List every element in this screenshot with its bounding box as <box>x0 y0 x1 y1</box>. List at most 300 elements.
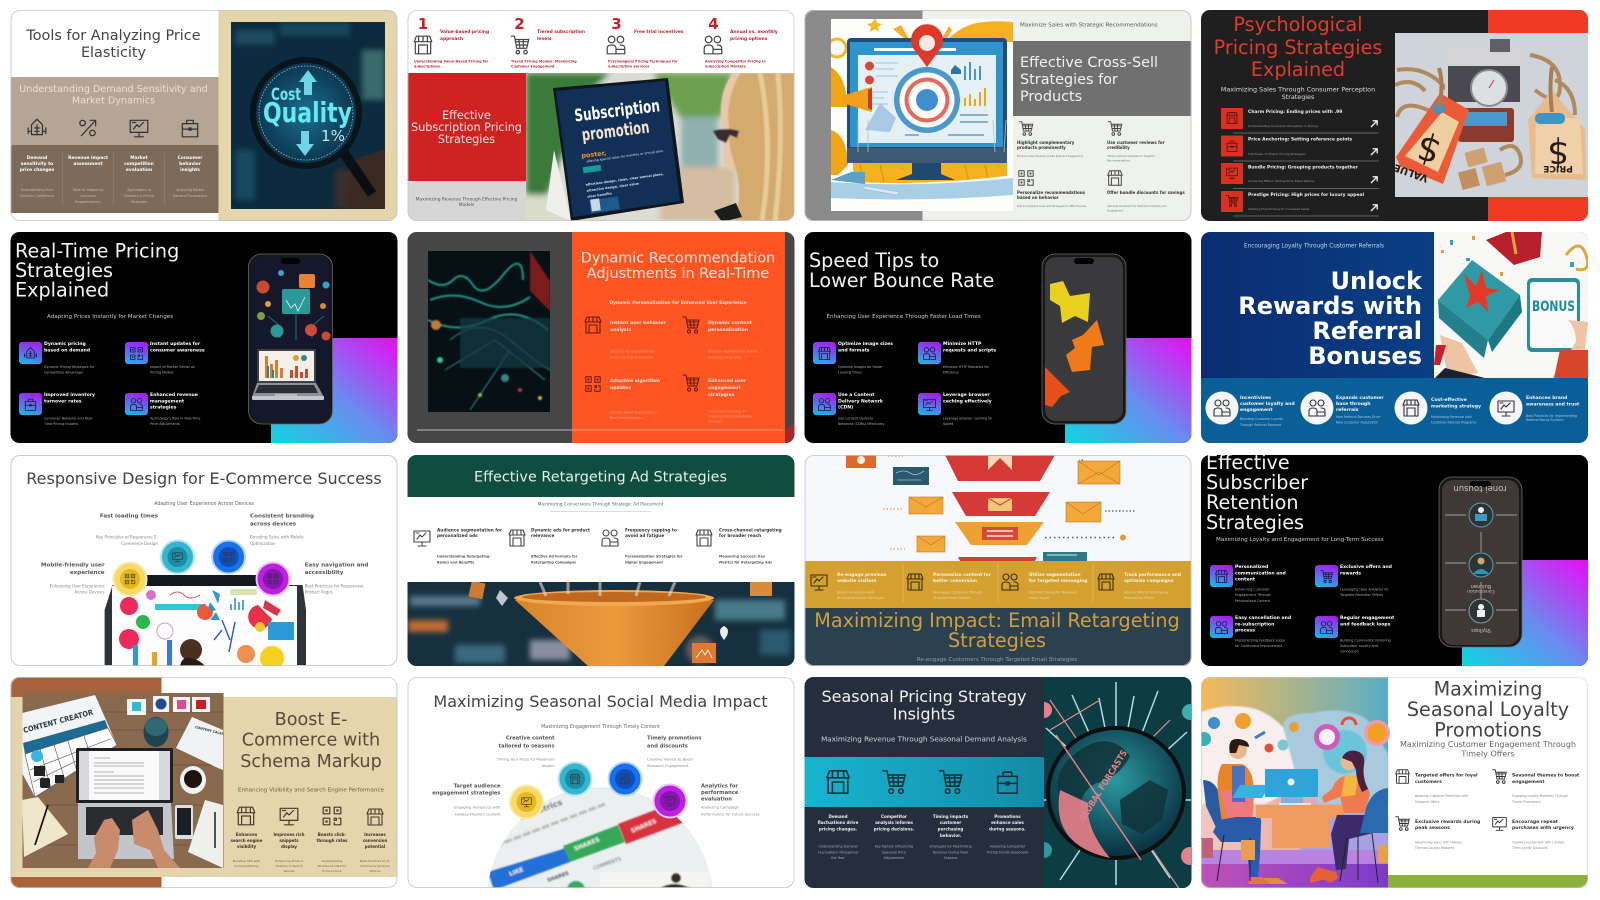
column descriptions: Strategies <box>131 200 147 204</box>
step descriptions <box>414 60 766 68</box>
column descriptions: Consumer <box>80 194 97 198</box>
title: Retention <box>1206 491 1299 514</box>
benefit descriptions: Through Referral Bonuses <box>1239 423 1282 427</box>
phone with org chart: Bulunan <box>1471 583 1491 589</box>
item descriptions <box>437 554 772 564</box>
feature titles: purchases with urgency <box>1512 825 1574 831</box>
feature titles: turnover rates <box>44 398 82 404</box>
feature descriptions: Maximizing Sales with Holiday- <box>1415 840 1463 844</box>
step descriptions: Subscription Services <box>608 64 649 68</box>
feature descriptions: Loading Times <box>838 370 862 374</box>
feature descriptions <box>43 365 200 426</box>
item titles: Personalize recommendations <box>1017 190 1086 195</box>
column titles: during seasons. <box>989 826 1026 832</box>
benefit titles: conversion <box>363 838 387 843</box>
feature titles: requests and scripts <box>943 348 996 354</box>
tagline: Encouraging Loyalty Through Customer Referrals <box>1244 244 1384 250</box>
feature icons <box>585 317 699 391</box>
title box: Effective <box>442 109 491 122</box>
benefit titles: display <box>281 844 297 849</box>
title band <box>1013 41 1192 116</box>
key point descriptions: Key Principles of Responsive E- <box>96 534 159 540</box>
key point titles: Analytics for <box>701 784 738 790</box>
item titles: Highlight complementary <box>1017 140 1075 145</box>
subtitle: Timely Offers <box>1460 750 1515 758</box>
column titles: enhance sales <box>991 820 1024 825</box>
key point descriptions: Enhancing User Experience <box>50 584 105 588</box>
photo: tablet subscription promotion <box>526 73 795 222</box>
feature descriptions: Themed Loyalty Rewards <box>1414 846 1454 850</box>
item descriptions: Basics and Benefits <box>437 560 474 564</box>
column descriptions: Strategies for Maximizing <box>929 844 972 848</box>
key point titles: Timely promotions <box>647 736 702 742</box>
feature titles: Exclusive offers and <box>1340 564 1392 570</box>
column descriptions: Analyzing Competitor <box>990 844 1026 848</box>
icon band <box>804 757 1044 807</box>
feature titles: engagement <box>1512 779 1545 785</box>
feature titles: caching effectively <box>943 398 992 404</box>
benefit titles: search engine <box>231 838 263 843</box>
action band: optimize campaigns <box>1124 578 1174 584</box>
feature descriptions <box>1235 588 1391 654</box>
benefit descriptions: New Customer Acquisition <box>1336 420 1378 424</box>
photo: price tags and camera: VALUE <box>1392 161 1430 184</box>
step descriptions: Analyzing Competitor Pricing in <box>705 60 766 64</box>
title band: Re-engage Customers Through Targeted Email Strategies <box>917 657 1077 663</box>
column titles: Competitor <box>881 814 907 819</box>
panel: effective subscription pricing strategies <box>408 10 795 222</box>
list titles: Bundle Pricing: Grouping products together <box>1248 164 1359 170</box>
step titles: Free trial incentives <box>634 29 684 35</box>
benefit descriptions: Markup <box>369 869 381 873</box>
title: Explained <box>1251 58 1345 81</box>
photo: magnifier cost quality: Quality <box>263 96 352 129</box>
title: Schema Markup <box>240 752 382 772</box>
benefit descriptions: Best Practices for Implementing <box>1526 414 1577 418</box>
column labels: price changes <box>20 167 55 173</box>
subtitle: Dynamic Personalization for Enhanced User Experience <box>609 300 747 306</box>
item titles: Offer bundle discounts for savings <box>1107 190 1185 195</box>
item descriptions: Measuring Success: Key <box>719 554 766 558</box>
photo: global forecast globe: GLOBAL FORCASTS <box>1078 749 1130 824</box>
column titles: pricing changes. <box>819 826 858 832</box>
panel: dynamic recommendation adjustments <box>408 232 795 443</box>
step titles: Value-based pricing <box>440 29 489 35</box>
benefit icons <box>1206 392 1522 424</box>
column descriptions: Analyzing Market <box>176 188 204 192</box>
benefit titles: potential <box>365 844 386 849</box>
photo: social media metrics dome: SHARES <box>547 870 570 884</box>
title box <box>408 73 526 181</box>
column descriptions: Responsiveness <box>75 200 101 204</box>
column descriptions: Elasticity Coefficients <box>20 194 54 198</box>
column titles: customer <box>940 820 961 825</box>
action band: Personalized Email Strategies <box>837 596 885 600</box>
column titles: purchasing <box>938 826 963 832</box>
panel: boost e-commerce with schema markup <box>10 677 398 888</box>
panel: seasonal pricing strategy insights <box>804 677 1199 890</box>
step numbers <box>419 18 718 29</box>
column labels: sensitivity to <box>21 161 53 167</box>
column descriptions: Seasons <box>944 856 958 860</box>
list descriptions: Understanding Consumer Perception in Pricing <box>1248 124 1318 128</box>
key point titles: evaluation <box>701 796 732 802</box>
benefit titles: awareness and trust <box>1526 402 1580 408</box>
benefit descriptions: Maximizing Revenue with <box>1431 415 1472 419</box>
feature descriptions: Engaging Loyalty Members Through <box>1512 794 1568 798</box>
feature titles: personalization <box>708 327 748 333</box>
step descriptions: Understanding Value-Based Pricing for <box>414 60 489 64</box>
feature titles: Dynamic content <box>708 320 753 326</box>
action band: Re-engage previous <box>837 572 887 578</box>
feature descriptions: Building Community: Fostering <box>1340 638 1391 642</box>
benefit titles: visibility <box>237 844 257 849</box>
column descriptions: Adjustments <box>884 856 905 860</box>
title band: Maximizing Impact: Email Retargeting <box>814 609 1180 632</box>
key point descriptions: Impact <box>542 764 555 768</box>
subtitle: Maximizing Loyalty and Engagement for Long-Term Success <box>1216 537 1384 543</box>
feature descriptions: Connection <box>1340 650 1359 654</box>
key point titles: Fast loading times <box>100 514 159 520</box>
feature descriptions: Targeted Retention Efforts <box>1339 593 1383 597</box>
feature titles: based on demand <box>44 348 90 354</box>
list descriptions: Anchoring Effect: Setting Price Expectations <box>1248 179 1315 183</box>
action band: website visitors <box>837 578 877 584</box>
panel: effective subscriber retention strategies <box>1201 451 1588 666</box>
column descriptions: Tools for Measuring <box>72 188 103 192</box>
feature descriptions: Consumer Behavior and Real- <box>44 416 94 420</box>
item titles: credibility <box>1107 145 1130 150</box>
item descriptions: Engagement <box>1107 208 1123 212</box>
feature titles: Seasonal themes to boost <box>1512 772 1580 778</box>
benefit titles: engagement <box>1240 407 1273 413</box>
item titles: based on behavior <box>1017 195 1059 200</box>
item titles: Frequency capping to <box>625 528 677 534</box>
panel: tools for analyzing price elasticity <box>10 10 398 221</box>
item descriptions: Effective Ad Formats for <box>531 554 578 558</box>
feature descriptions: Optimize Images for Faster <box>838 365 883 369</box>
benefit titles: marketing strategy <box>1431 404 1481 410</box>
feature titles: Use a Content <box>838 392 875 398</box>
benefit descriptions <box>233 859 390 873</box>
feature descriptions: Continuous Learning for <box>708 410 747 414</box>
column labels: evaluation <box>126 167 152 173</box>
feature descriptions: Feedback Integration <box>708 356 742 360</box>
feature titles: Regular engagement <box>1340 615 1395 621</box>
title: Unlock <box>1331 267 1423 295</box>
benefit titles: Increases <box>364 832 386 837</box>
subtitle: Adapting User Experience Across Devices <box>154 501 254 507</box>
item titles: Dynamic ads for product <box>531 528 590 534</box>
feature titles: Dynamic pricing <box>44 341 86 347</box>
progress rings <box>510 762 686 818</box>
column labels: competition <box>124 161 154 167</box>
feature descriptions: Technology's Role in Real-Time <box>149 416 200 420</box>
benefit titles: Expands customer <box>1336 395 1384 401</box>
feature titles: strategies <box>708 392 735 398</box>
column descriptions: Revenue During Peak <box>933 850 968 854</box>
key point titles: Easy navigation and <box>305 562 368 568</box>
item descriptions: Understanding Retargeting: <box>437 554 491 558</box>
feature titles: (CDN) <box>838 404 853 410</box>
photo: magnifier cost quality: Cost <box>271 85 301 105</box>
photo: content creator desk: CONTENT CREATOR <box>22 708 94 735</box>
step descriptions: Subscription Markets <box>705 64 746 68</box>
subtitle: Maximizing Revenue Through Seasonal Demand Analysis <box>821 734 1027 744</box>
feature descriptions: Dynamic Pricing Strategies for <box>44 365 95 369</box>
benefit descriptions: Customer Referral Programs <box>1431 420 1476 424</box>
title: Insights <box>893 704 955 724</box>
feature titles: Easy cancellation and <box>1235 615 1291 621</box>
panel: maximizing seasonal social media impact <box>408 677 794 899</box>
title: Explained <box>15 278 109 302</box>
benefit titles: referrals <box>1336 407 1359 413</box>
key point descriptions: Seasonal Engagement <box>647 764 689 768</box>
column descriptions <box>818 844 1028 860</box>
action band: Track performance and <box>1124 572 1181 578</box>
title box: Subscription Pricing <box>411 121 522 134</box>
funnel and envelopes illustration <box>846 455 1135 561</box>
subtitle: Maximizing Conversions Through Strategic Ad Placement <box>538 502 664 508</box>
illustration: two people at a desk <box>1197 677 1390 888</box>
column descriptions: Pricing Trends Seasonally <box>987 850 1028 854</box>
feature titles: Encourage repeat <box>1512 819 1559 825</box>
key point titles: accessibility <box>305 570 344 576</box>
subtitle box <box>408 181 526 221</box>
benefit descriptions: How Referral Bonuses Drive <box>1336 415 1381 419</box>
benefit descriptions: Implementing <box>322 859 343 863</box>
list titles: Charm Pricing: Ending prices with .99 <box>1248 109 1342 115</box>
phone with org chart: ronei tousun <box>1453 483 1507 493</box>
feature titles: communication and <box>1235 570 1286 576</box>
benefit titles: through rates <box>316 838 348 843</box>
item descriptions: Retargeting Campaigns <box>531 560 576 564</box>
step numbers: 4 <box>708 15 719 33</box>
feature titles: process <box>1235 628 1255 634</box>
panel: effective retargeting ad strategies <box>408 455 794 666</box>
benefit descriptions: E-Commerce <box>322 869 342 873</box>
photo: gift and bonus phone: BONUS <box>1532 299 1575 315</box>
item titles <box>437 528 782 539</box>
step titles: Annual vs. monthly <box>730 29 778 35</box>
column labels: behavior <box>179 161 202 167</box>
title band: Effective Cross-Sell <box>1020 55 1158 71</box>
photo: magnifier cost quality: 1% <box>321 127 345 145</box>
feature descriptions: Engagement Through <box>1235 593 1271 597</box>
panel: effective cross-sell strategies <box>804 10 1192 221</box>
benefit titles: Improves rich <box>274 832 305 837</box>
feature titles: Improved inventory <box>44 392 95 398</box>
phone with org chart <box>1439 477 1522 647</box>
benefit descriptions: Best Practices for E- <box>360 859 390 863</box>
feature descriptions: Boosting Customer Retention with <box>1415 794 1468 798</box>
benefit titles: base through <box>1336 401 1371 407</box>
feature titles <box>44 341 205 410</box>
panel: maximizing impact email retargeting <box>804 455 1192 666</box>
item titles: for broader reach <box>719 533 761 539</box>
benefit descriptions <box>1239 414 1577 427</box>
column titles: Demand <box>828 814 848 819</box>
benefit titles: customer loyalty and <box>1240 401 1295 407</box>
list descriptions: Utilizing Price Ending for Increased Sales <box>1248 207 1310 211</box>
feature icons <box>1396 770 1506 830</box>
column descriptions: Applications of <box>127 188 152 192</box>
feature icons <box>1210 565 1338 638</box>
title band: Strategies for <box>1020 72 1118 88</box>
title: Maximizing Seasonal Social Media Impact <box>433 692 768 711</box>
feature titles: Optimize image sizes <box>838 341 893 347</box>
subtitle: Maximizing Customer Engagement Through <box>1400 740 1576 749</box>
column descriptions <box>20 188 207 204</box>
feature descriptions: Price Adjustments <box>150 422 180 426</box>
feature titles: customers <box>1415 779 1442 785</box>
title: Promotions <box>1434 718 1542 742</box>
photo: social media metrics dome <box>480 780 720 899</box>
action band: Utilize segmentation <box>1029 572 1080 578</box>
benefit descriptions: Referral Bonus Systems <box>1526 418 1564 422</box>
feature titles: Enhanced user <box>708 378 747 384</box>
item descriptions: Metrics for Retargeting Ads <box>719 560 772 564</box>
photo: magnifier cost quality <box>231 22 385 209</box>
subtitle: Understanding Demand Sensitivity and <box>19 84 208 95</box>
feature descriptions: Accuracy <box>708 420 723 424</box>
panel: speed tips to lower bounce rate <box>804 232 1192 443</box>
key point titles: and discounts <box>647 744 688 750</box>
benefit titles: snippets <box>279 838 299 843</box>
panel: real-time pricing strategies <box>10 232 398 443</box>
feature descriptions: Enhancing Customer <box>1235 588 1270 592</box>
photo: tablet subscription promotion: offering special rates for monthly or annual plan. <box>586 149 664 164</box>
key point descriptions: Optimization <box>250 541 276 546</box>
feature titles: and formats <box>838 348 870 354</box>
phone with arrows <box>1042 254 1126 424</box>
feature descriptions: Leveraging Data Analytics for <box>1340 588 1390 592</box>
title: Effective <box>1206 451 1290 474</box>
item titles: Use customer reviews for <box>1107 140 1165 145</box>
column descriptions: the Year <box>831 856 845 860</box>
step descriptions: Tiered Pricing Models: Maximizing <box>511 60 577 64</box>
list descriptions <box>1247 124 1318 211</box>
item icons <box>414 530 712 546</box>
key point descriptions: Commerce Design <box>121 541 158 546</box>
column descriptions: Fluctuations Throughout <box>818 850 859 854</box>
benefit titles <box>231 832 387 849</box>
subtitle: Strategies <box>1282 93 1315 101</box>
feature descriptions: Networks (CDNs) Effectively <box>838 422 884 426</box>
benefit titles: Cost-effective <box>1431 397 1467 403</box>
title: Speed Tips to <box>809 249 939 272</box>
benefit descriptions: Boosting SEO with <box>233 859 260 863</box>
action band: Email Impact <box>1029 596 1051 600</box>
key point descriptions: Boosting Sales with Mobile <box>250 534 304 540</box>
benefit descriptions: Enhancing Product <box>275 859 304 863</box>
step descriptions: Customer Engagement <box>511 64 555 68</box>
title: Tools for Analyzing Price <box>25 28 201 44</box>
feature descriptions: Real-Time Scenarios <box>610 416 642 420</box>
benefit titles: Enhances <box>236 832 258 837</box>
photo: gift and bonus phone <box>1434 232 1588 378</box>
feature titles: Exclusive rewards during <box>1415 819 1480 825</box>
key point titles: Target audience <box>454 784 501 790</box>
feature titles: Leverage browser <box>943 392 990 398</box>
feature titles: peak seasons <box>1415 825 1450 831</box>
photo: tablet subscription promotion: effortless design, clean, clear annual plans, <box>585 172 664 187</box>
feature descriptions <box>1414 794 1568 850</box>
photo: price tags and camera: $ <box>1411 126 1445 172</box>
phone with laptop illustration <box>248 254 332 424</box>
title box: Strategies <box>438 133 495 146</box>
column descriptions: Key Factors Influencing <box>875 844 913 848</box>
photo: social media metrics dome: SHARES <box>630 818 658 835</box>
benefit descriptions: Visibility in Search <box>275 864 303 868</box>
phone with org chart: Constitution <box>1467 588 1495 594</box>
feature descriptions: Seasonal Offers <box>1415 800 1440 804</box>
benefit titles <box>1240 395 1580 413</box>
feature titles: Instant user behavior <box>610 320 667 326</box>
item descriptions: Personalization Strategies for <box>625 554 683 558</box>
column titles: pricing decisions. <box>874 826 915 832</box>
step descriptions: Psychological Pricing Techniques for <box>608 60 678 64</box>
feature descriptions: Leverage Browser Caching for <box>943 416 993 420</box>
benefit descriptions: Structured Data for <box>317 864 347 868</box>
feature descriptions: Use Content Delivery <box>838 416 873 420</box>
subtitle: Market Dynamics <box>72 96 155 106</box>
feature titles: Minimize HTTP <box>943 341 982 347</box>
benefit titles: Boosts click- <box>318 832 347 837</box>
benefit descriptions: Boosting Customer Loyalty <box>1240 417 1283 421</box>
title: Pricing Strategies <box>1214 36 1382 59</box>
list titles <box>1248 109 1364 198</box>
feature descriptions: Subscriber Loyalty and <box>1340 644 1378 648</box>
photo: tablet subscription promotion: promotion <box>581 118 651 146</box>
photo: price tags and camera <box>1392 33 1588 197</box>
feature descriptions: Adaptive Algorithms for Instant <box>708 350 759 354</box>
key point titles: performance <box>701 790 739 796</box>
title band: Strategies <box>948 629 1046 652</box>
feature titles: consumer awareness <box>150 348 205 354</box>
key point descriptions <box>454 758 760 816</box>
title: Responsive Design for E-Commerce Success <box>26 469 382 488</box>
title band <box>804 608 1192 666</box>
key point descriptions: Holiday-Themed Content <box>455 812 501 816</box>
feature descriptions: Minimize HTTP Requests for <box>943 365 990 369</box>
header band: Effective Retargeting Ad Strategies <box>474 470 727 486</box>
step numbers: 2 <box>514 15 525 33</box>
item titles: Audience segmentation for <box>437 528 503 534</box>
feature titles: strategies <box>150 404 177 410</box>
subtitle: Adapting Prices Instantly for Market Changes <box>47 314 173 320</box>
column titles <box>818 814 1026 838</box>
column titles: fluctuations drive <box>818 820 859 825</box>
feature icons <box>19 342 148 415</box>
subtitle box: Maximizing Revenue Through Effective Pricing <box>416 196 518 202</box>
key point titles <box>432 736 739 802</box>
feature descriptions: Improved Recommendation <box>708 414 752 418</box>
column descriptions: Elasticity in Pricing <box>124 194 154 198</box>
feature titles <box>1235 564 1395 634</box>
step numbers: 3 <box>611 15 622 33</box>
feature descriptions <box>838 365 993 426</box>
feature titles: Targeted offers for loyal <box>1415 772 1478 778</box>
feature titles: content <box>1235 576 1256 582</box>
column labels: Demand <box>27 155 47 161</box>
photo: tablet subscription promotion: clear benefits <box>587 191 612 199</box>
step titles <box>440 30 778 41</box>
feature titles: analysis <box>610 327 631 333</box>
feature descriptions: Time Pricing Insights <box>43 422 78 426</box>
key point titles: across devices <box>250 522 297 528</box>
photo: social media metrics dome: SHARES <box>573 836 601 853</box>
